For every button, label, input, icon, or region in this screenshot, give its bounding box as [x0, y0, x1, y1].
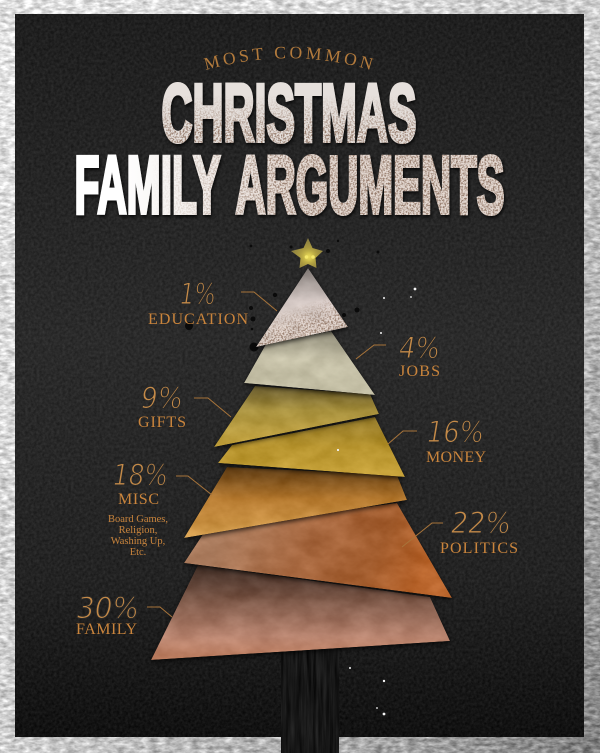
heading: most common	[203, 46, 374, 70]
heading: most common: MOST COMMON	[203, 46, 374, 70]
label: misc 18%: 18%	[113, 458, 168, 492]
tree tier: gifts 9%	[214, 386, 379, 447]
label: jobs 4%	[356, 331, 440, 380]
snow specks	[349, 288, 416, 715]
label: education 1%	[148, 277, 277, 328]
label: gifts 9%: 9%	[141, 381, 183, 415]
label: family 30%: 30%	[77, 591, 139, 625]
label: money 16%	[388, 415, 486, 466]
tree tier: education 1%	[256, 268, 348, 347]
label: politics 22%: 22%	[451, 506, 511, 540]
label: education 1%: 1%	[180, 277, 216, 311]
tree trunk	[281, 640, 339, 753]
label: misc 18%: Etc.	[130, 547, 146, 558]
tree tier: misc 18%	[184, 467, 407, 538]
label: family 30%: FAMILY	[76, 621, 137, 638]
tree tier: family 30%	[151, 565, 450, 660]
icon: star	[291, 238, 323, 268]
title	[74, 68, 504, 231]
label: jobs 4%: JOBS	[399, 363, 440, 380]
label: misc 18%	[108, 458, 212, 558]
speck on money tier	[337, 449, 339, 451]
label: misc 18%: Religion,	[119, 525, 157, 536]
label: family 30%	[76, 591, 172, 638]
label: politics 22%	[402, 506, 518, 557]
label: gifts 9%: GIFTS	[138, 414, 186, 431]
label: education 1%: EDUCATION	[148, 311, 248, 328]
label: jobs 4%: 4%	[399, 331, 440, 365]
tree tier: politics 22%	[184, 503, 452, 598]
label: gifts 9%	[138, 381, 231, 431]
title: FAMILY	[74, 140, 220, 231]
label: misc 18%: Board Games,	[108, 514, 168, 525]
ink splatter	[185, 240, 380, 352]
tree tier: jobs 4%	[244, 331, 375, 395]
label: money 16%: 16%	[427, 415, 484, 449]
label: misc 18%: MISC	[118, 491, 159, 508]
label: misc 18%: Washing Up,	[111, 536, 165, 547]
label: money 16%: MONEY	[426, 449, 486, 466]
tree tier: money 16%	[218, 417, 405, 477]
label: politics 22%: POLITICS	[440, 540, 518, 557]
